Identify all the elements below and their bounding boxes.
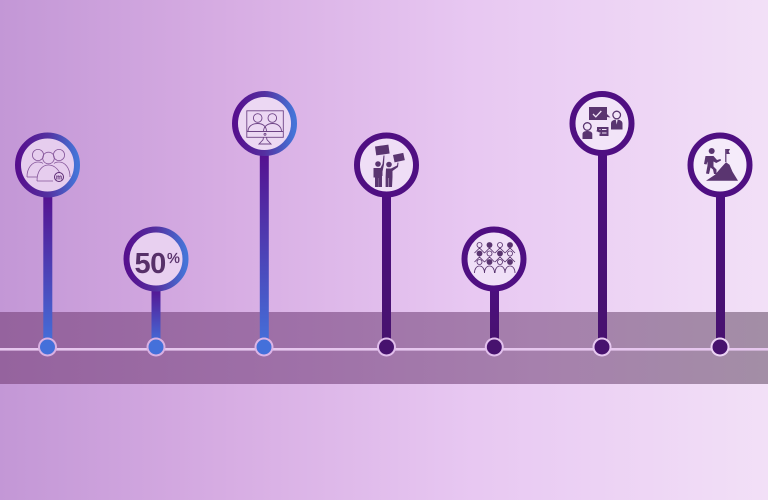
marker 2: 50 percent: %: [167, 251, 180, 267]
marker 5: crowd: [464, 230, 524, 356]
marker 4: protest: [357, 136, 416, 356]
icon: group of people: [27, 149, 70, 182]
icon: protesters with signs: [374, 145, 405, 187]
marker 6: consultation: [572, 94, 632, 356]
marker 1: community members: [18, 136, 77, 356]
icon label: m: m: [56, 174, 62, 182]
timeline band: [0, 312, 768, 384]
icon: two people with speech boxes: [582, 107, 622, 139]
stat: 50%: 50: [134, 248, 166, 280]
icon: crowd of people: [474, 242, 515, 273]
marker 3: video call: [235, 94, 294, 356]
icon: monitor with two people: [247, 111, 283, 144]
marker 7: summit: [690, 136, 750, 356]
timeline line: [0, 348, 768, 351]
icon: climber and flag on mountain: [704, 148, 738, 181]
marker 2: 50 percent: [126, 230, 186, 356]
